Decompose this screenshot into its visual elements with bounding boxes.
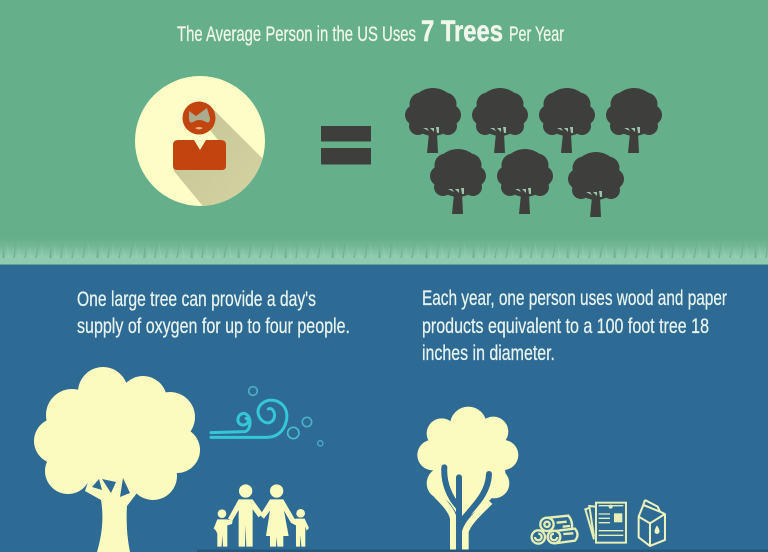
icon: milk carton (639, 500, 665, 546)
icon: family of four holding hands (214, 484, 309, 547)
title: The Average Person in the US Uses (177, 23, 416, 46)
icon group: seven trees (405, 88, 662, 217)
text block: wood and paper fact: inches in diameter. (422, 342, 555, 365)
text block: oxygen fact (77, 288, 350, 338)
panel: blue lower background (0, 265, 768, 552)
text block: oxygen fact: supply of oxygen for up to four people. (77, 315, 350, 338)
icon: log pile (532, 516, 577, 544)
panel: green upper background (0, 0, 768, 265)
title (177, 15, 564, 48)
icon: equals sign (321, 126, 371, 164)
text block: oxygen fact: One large tree can provide a day's (77, 288, 316, 311)
title: 7 Trees (421, 15, 503, 48)
title: Per Year (509, 23, 564, 46)
illustration: large cream tree (34, 367, 200, 552)
grass strip (0, 238, 768, 265)
icon: person in circle with long shadow (135, 76, 265, 206)
bottom video edge strip (197, 550, 768, 552)
illustration: slim cream tree (417, 407, 518, 552)
icon: newspaper (585, 503, 626, 543)
text block: wood and paper fact (422, 287, 727, 365)
icon: wind swirl with air bubbles (211, 387, 323, 446)
